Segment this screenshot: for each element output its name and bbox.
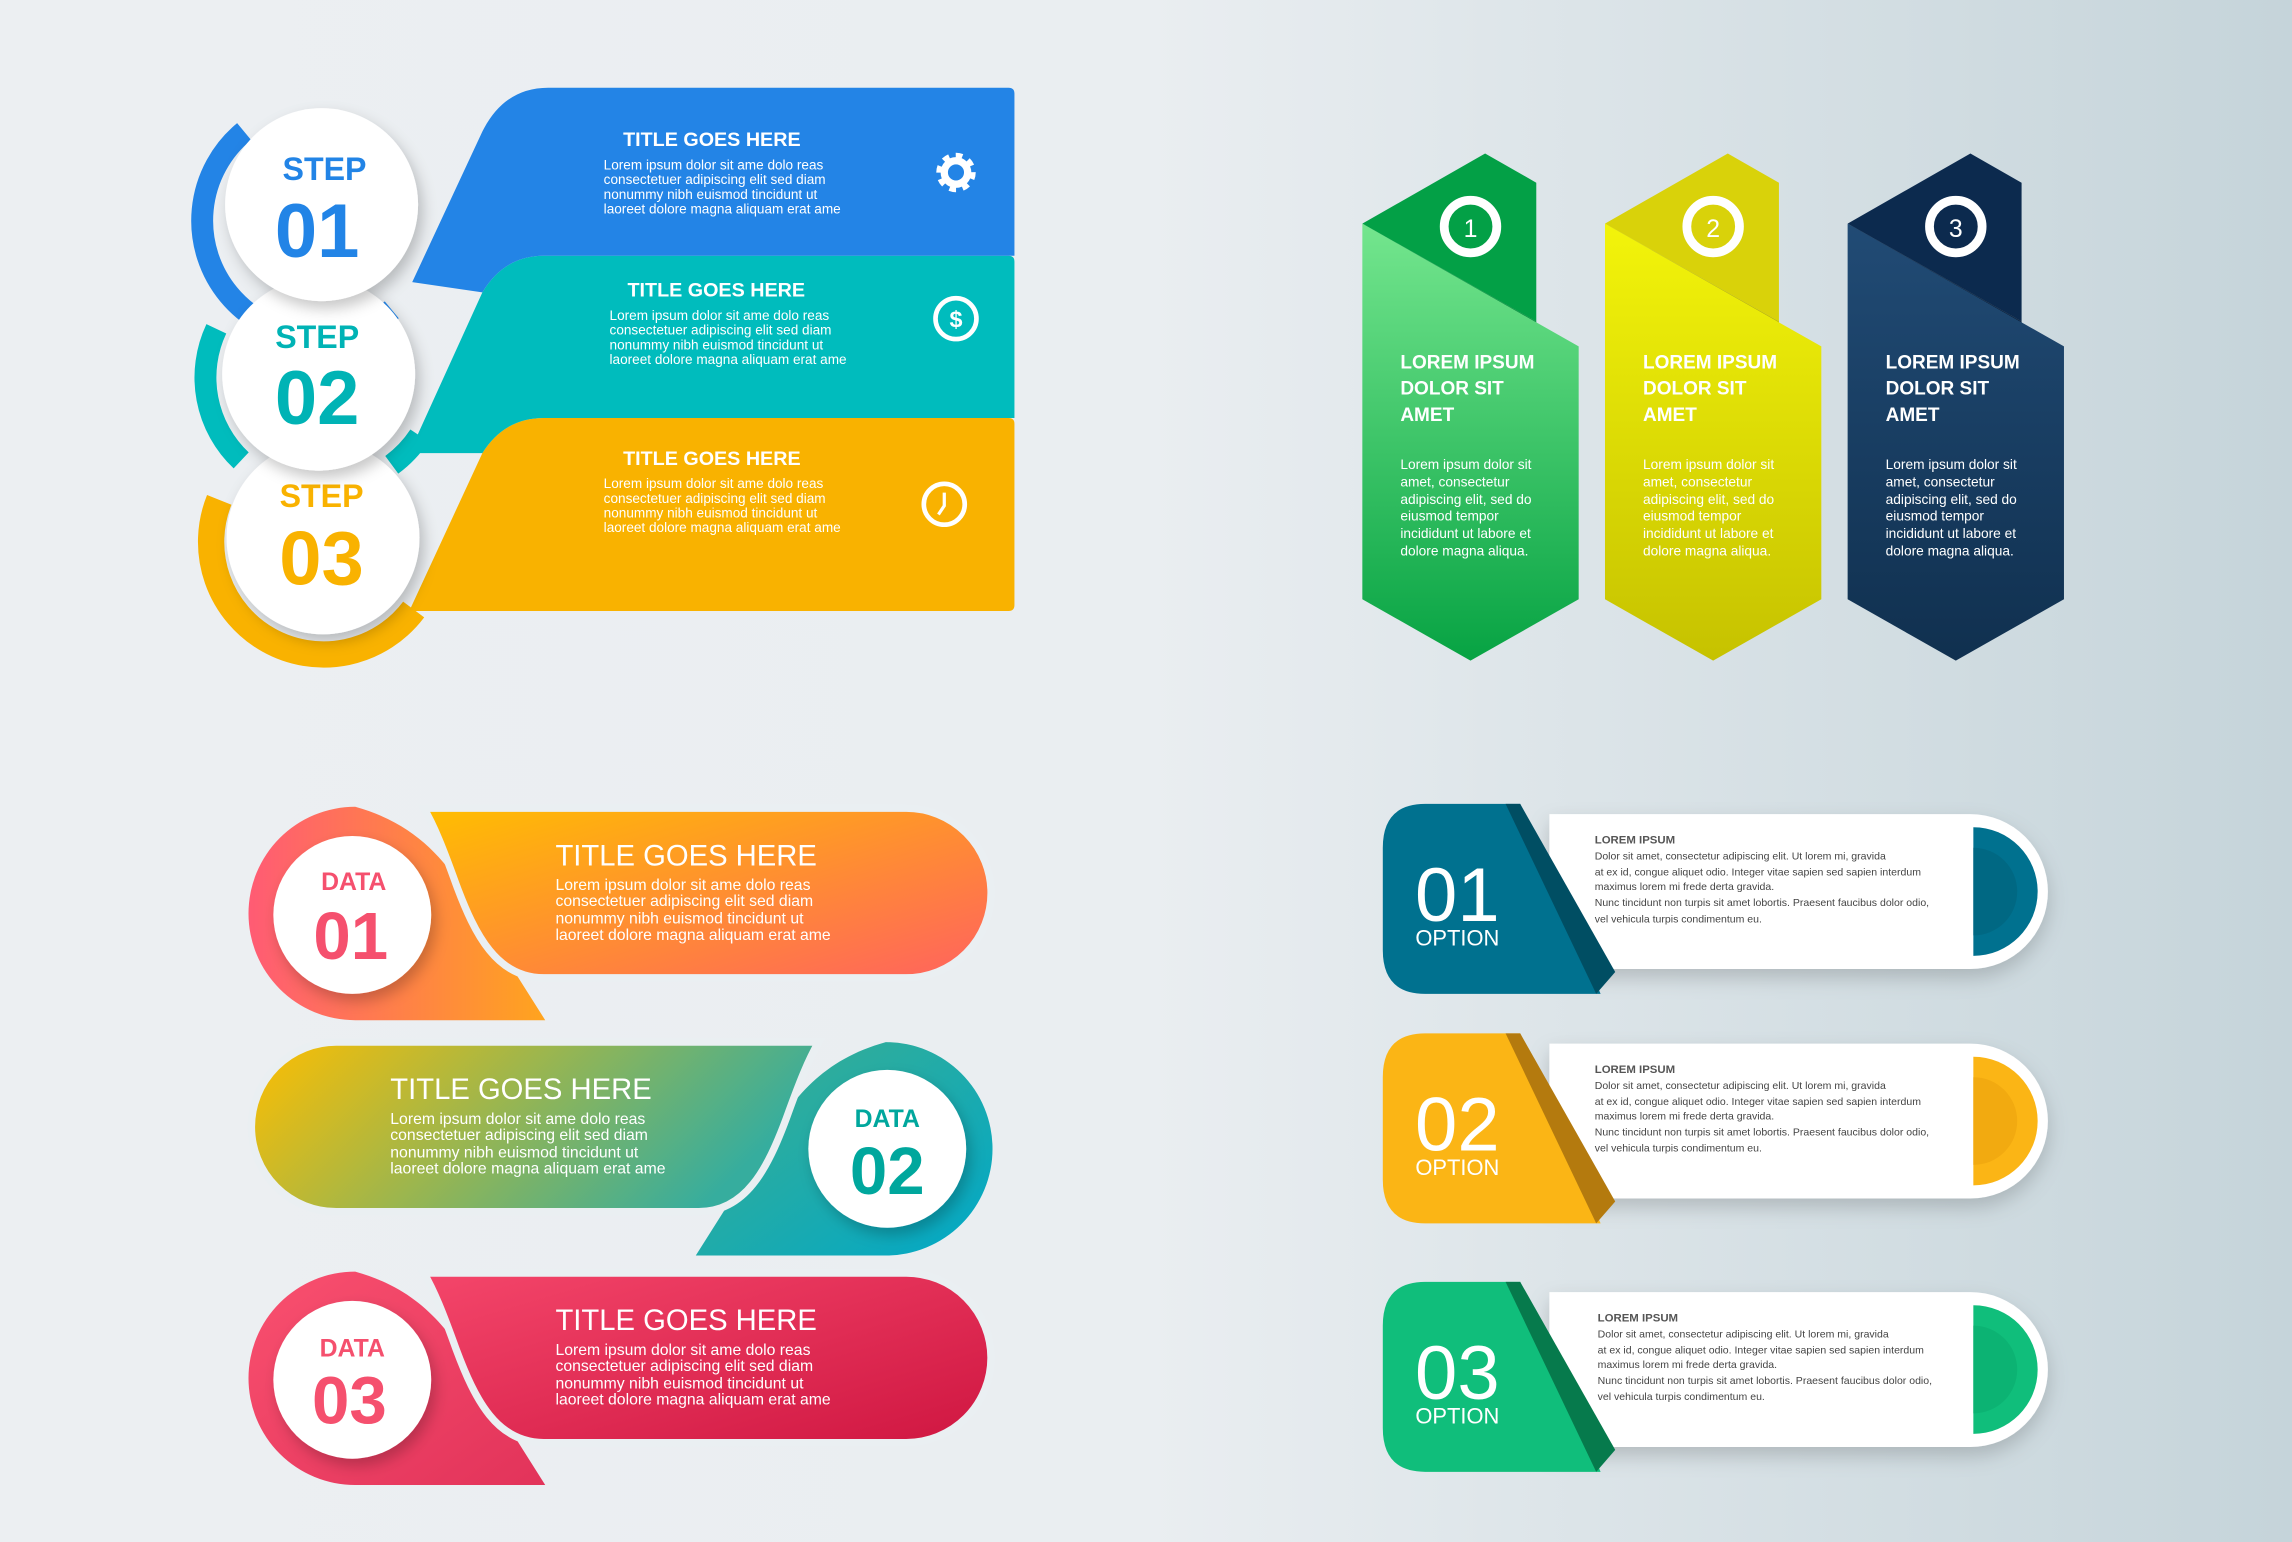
hexagon 3 navy: eiusmod tempor <box>1886 508 1984 523</box>
hexagon 2 yellow: eiusmod tempor <box>1643 508 1742 523</box>
band: step 03: laoreet dolore magna aliquam erat ame <box>604 520 841 535</box>
icon: gear <box>940 156 972 189</box>
icon: dollar <box>936 298 976 339</box>
ring: step 01 <box>202 132 392 336</box>
data 02 <box>251 1042 993 1256</box>
option 02: vel vehicula turpis condimentum eu. <box>1595 1143 1762 1155</box>
hexagon 1 green: DOLOR SIT <box>1400 379 1504 400</box>
hexagon 2 yellow <box>1605 153 1821 661</box>
band: step 01: nonummy nibh euismod tincidunt ut <box>604 187 818 202</box>
circle: step 02 <box>222 278 415 471</box>
data 01: DATA <box>321 869 386 896</box>
band: step 01: consectetuer adipiscing elit sed diam <box>604 172 826 187</box>
data 01: nonummy nibh euismod tincidunt ut <box>555 911 804 928</box>
data 03: nonummy nibh euismod tincidunt ut <box>555 1376 804 1393</box>
hexagon 2 yellow: AMET <box>1643 405 1697 426</box>
option 01: OPTION <box>1415 926 1499 951</box>
data 01: consectetuer adipiscing elit sed diam <box>555 893 813 910</box>
option 03: at ex id, congue aliquet odio. Integer vitae sapien sed sapien interdum <box>1598 1344 1924 1356</box>
band: step 03: Lorem ipsum dolor sit ame dolo reas <box>604 476 824 491</box>
hexagon 2 yellow: LOREM IPSUM <box>1643 352 1777 373</box>
data 03 <box>248 1272 991 1485</box>
hexagon 2 yellow: dolore magna aliqua. <box>1643 543 1771 558</box>
hexagon 1 green: Lorem ipsum dolor sit <box>1400 457 1532 472</box>
hexagon 3 navy: 3 <box>1949 216 1963 243</box>
icon: clock <box>924 484 965 525</box>
option 02: OPTION <box>1415 1155 1499 1180</box>
hexagon 2 yellow: 2 <box>1706 216 1720 243</box>
option 01: maximus lorem mi frede derta gravida. <box>1595 881 1774 893</box>
data 03: TITLE GOES HERE <box>555 1305 817 1337</box>
circle: step 03 <box>227 441 420 634</box>
hexagon 2 yellow: Lorem ipsum dolor sit <box>1643 457 1774 472</box>
ring: step 02 <box>205 329 420 465</box>
band: step 02: nonummy nibh euismod tincidunt ut <box>610 337 823 352</box>
option 01: LOREM IPSUM <box>1595 834 1675 846</box>
hexagon 1 green: incididunt ut labore et <box>1400 526 1531 541</box>
hexagon 3 navy: LOREM IPSUM <box>1886 352 2020 373</box>
data 03: Lorem ipsum dolor sit ame dolo reas <box>555 1342 811 1359</box>
data 02: TITLE GOES HERE <box>390 1074 652 1106</box>
option 02: maximus lorem mi frede derta gravida. <box>1595 1111 1774 1123</box>
option 01: Dolor sit amet, consectetur adipiscing elit. Ut lorem mi, gravida <box>1595 850 1886 862</box>
option 02 <box>1383 1033 2048 1223</box>
hexagon 3 navy: AMET <box>1886 405 1940 426</box>
data 01: Lorem ipsum dolor sit ame dolo reas <box>555 877 811 894</box>
circle: step 01 <box>225 108 418 301</box>
hexagon 3 navy: amet, consectetur <box>1886 475 1995 490</box>
ring: step 03 <box>211 500 414 654</box>
option 03 <box>1383 1282 2048 1472</box>
band: step 03: TITLE GOES HERE <box>623 448 801 470</box>
option 01: at ex id, congue aliquet odio. Integer vitae sapien sed sapien interdum <box>1595 867 1921 879</box>
data 02: DATA <box>855 1106 920 1133</box>
band: step 03: nonummy nibh euismod tincidunt ut <box>604 505 818 520</box>
hexagon 1 green <box>1362 153 1579 661</box>
data 03: consectetuer adipiscing elit sed diam <box>555 1358 813 1375</box>
band: step 03: consectetuer adipiscing elit sed diam <box>604 491 826 506</box>
band: step 02: laoreet dolore magna aliquam erat ame <box>610 352 847 367</box>
hexagon 1 green: adipiscing elit, sed do <box>1400 492 1532 507</box>
data 01: TITLE GOES HERE <box>555 840 817 872</box>
band: step 02: consectetuer adipiscing elit sed diam <box>610 323 831 338</box>
band: step 03 <box>409 418 1014 611</box>
circle: step 02: STEP <box>275 319 359 355</box>
panel: data <box>248 807 993 1485</box>
data 02: nonummy nibh euismod tincidunt ut <box>390 1145 639 1162</box>
option 03: vel vehicula turpis condimentum eu. <box>1598 1391 1765 1403</box>
circle: step 02: 02 <box>275 356 359 441</box>
band: step 01: Lorem ipsum dolor sit ame dolo reas <box>604 158 824 173</box>
hexagon 1 green: dolore magna aliqua. <box>1400 543 1528 558</box>
option 03: LOREM IPSUM <box>1598 1312 1678 1324</box>
option 03: Dolor sit amet, consectetur adipiscing elit. Ut lorem mi, gravida <box>1598 1328 1889 1340</box>
band: step 01 <box>412 88 1014 292</box>
data 03: laoreet dolore magna aliquam erat ame <box>555 1392 831 1409</box>
hexagon 2 yellow: incididunt ut labore et <box>1643 526 1774 541</box>
hexagon 1 green: eiusmod tempor <box>1400 508 1499 523</box>
band: step 02: Lorem ipsum dolor sit ame dolo reas <box>610 308 829 323</box>
panel: steps <box>202 88 1014 654</box>
option 02: Dolor sit amet, consectetur adipiscing elit. Ut lorem mi, gravida <box>1595 1080 1886 1092</box>
data 01: 01 <box>313 899 388 974</box>
hexagon 1 green: LOREM IPSUM <box>1400 352 1534 373</box>
circle: step 03: 03 <box>279 517 364 602</box>
data 02: laoreet dolore magna aliquam erat ame <box>390 1161 666 1178</box>
option 03: 03 <box>1415 1331 1500 1416</box>
hexagon 3 navy: Lorem ipsum dolor sit <box>1886 457 2017 472</box>
option 03: OPTION <box>1415 1404 1499 1429</box>
data 02: 02 <box>850 1134 925 1209</box>
data 03: DATA <box>320 1335 385 1362</box>
option 02: 02 <box>1415 1082 1500 1167</box>
hexagon 2 yellow: adipiscing elit, sed do <box>1643 492 1775 507</box>
band: step 01: laoreet dolore magna aliquam erat ame <box>604 201 841 216</box>
option 01 <box>1383 804 2048 994</box>
circle: step 03: STEP <box>280 478 364 514</box>
option 03: maximus lorem mi frede derta gravida. <box>1598 1359 1777 1371</box>
panel: hexagons <box>1362 153 2064 661</box>
data 01 <box>248 807 991 1020</box>
hexagon 1 green: 1 <box>1464 216 1477 243</box>
hexagon 3 navy <box>1848 153 2064 661</box>
option 03: Nunc tincidunt non turpis sit amet lobortis. Praesent faucibus dolor odio, <box>1598 1375 1932 1387</box>
icon: dollar: $ <box>949 306 962 332</box>
option 01: 01 <box>1415 853 1500 938</box>
band: step 01: TITLE GOES HERE <box>623 129 801 151</box>
data 01: laoreet dolore magna aliquam erat ame <box>555 927 831 944</box>
hexagon 1 green: amet, consectetur <box>1400 475 1510 490</box>
option 01: Nunc tincidunt non turpis sit amet lobortis. Praesent faucibus dolor odio, <box>1595 897 1929 909</box>
hexagon 1 green: AMET <box>1400 405 1455 426</box>
data 02: consectetuer adipiscing elit sed diam <box>390 1127 648 1144</box>
option 01: vel vehicula turpis condimentum eu. <box>1595 913 1762 925</box>
hexagon 3 navy: adipiscing elit, sed do <box>1886 492 2017 507</box>
hexagon 2 yellow: amet, consectetur <box>1643 475 1752 490</box>
option 02: Nunc tincidunt non turpis sit amet lobortis. Praesent faucibus dolor odio, <box>1595 1127 1929 1139</box>
circle: step 01: STEP <box>283 151 366 187</box>
data 02: Lorem ipsum dolor sit ame dolo reas <box>390 1111 645 1128</box>
circle: step 01: 01 <box>275 189 359 274</box>
band: step 02: TITLE GOES HERE <box>627 280 805 302</box>
option 02: LOREM IPSUM <box>1595 1064 1675 1076</box>
hexagon 3 navy: incididunt ut labore et <box>1886 526 2016 541</box>
hexagon 2 yellow: DOLOR SIT <box>1643 379 1747 400</box>
hexagon 3 navy: DOLOR SIT <box>1886 379 1989 400</box>
data 03: 03 <box>312 1364 387 1439</box>
hexagon 3 navy: dolore magna aliqua. <box>1886 543 2014 558</box>
panel: options <box>1383 804 2048 1472</box>
band: step 02 <box>409 256 1014 453</box>
option 02: at ex id, congue aliquet odio. Integer vitae sapien sed sapien interdum <box>1595 1096 1921 1108</box>
